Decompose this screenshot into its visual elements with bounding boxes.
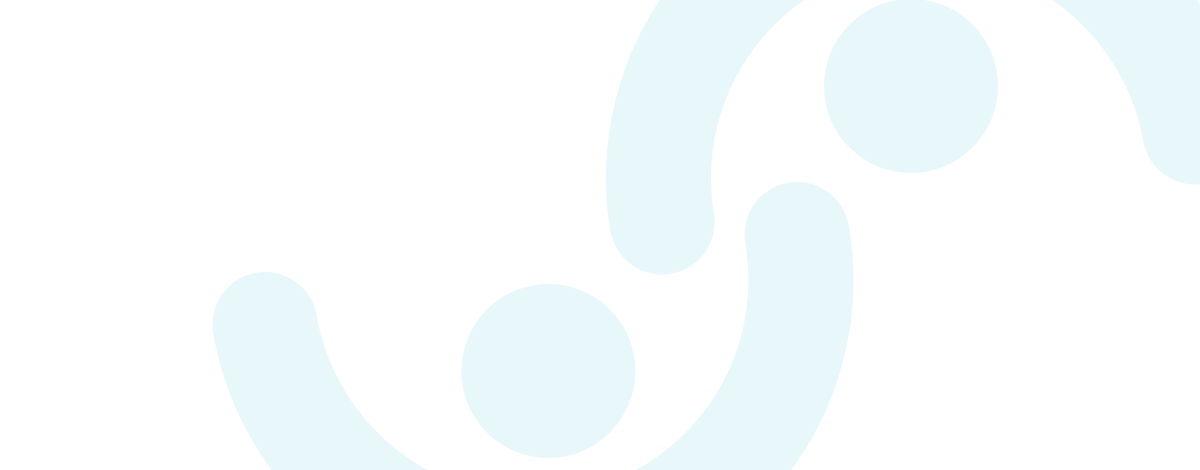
upper arc [658, 0, 1195, 222]
upper circle [824, 0, 998, 173]
lower circle [461, 284, 635, 458]
lower arc [265, 234, 801, 470]
